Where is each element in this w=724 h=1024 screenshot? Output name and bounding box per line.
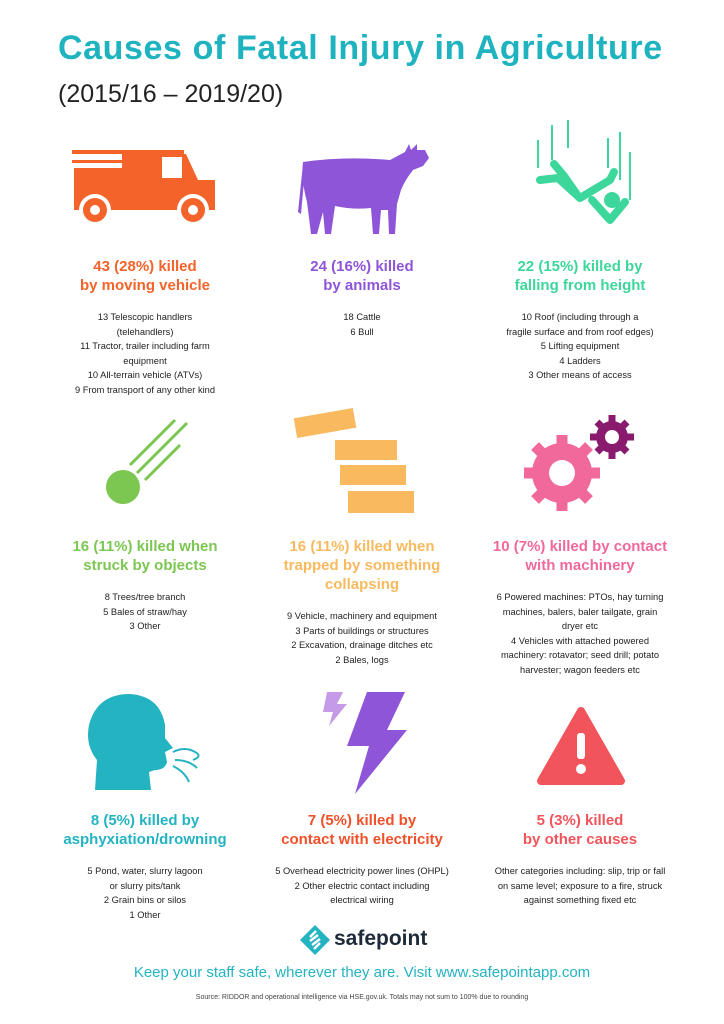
- details: trapped: 3 Parts of buildings or structures: [295, 626, 429, 636]
- details: height: fragile surface and from roof edges): [506, 326, 654, 336]
- details: asphyxiation: [87, 866, 203, 920]
- details: other: [495, 866, 665, 905]
- title: Causes of Fatal Injury in Agriculture: [58, 29, 663, 67]
- icon: meteor: [106, 419, 188, 504]
- heading: asphyxiation: 8 (5%) killed by: [91, 812, 199, 829]
- heading: trapped: trapped by something: [284, 557, 440, 574]
- tagline: Keep your staff safe, wherever they are. Visit www.safepointapp.com: [134, 964, 590, 981]
- icon: gears: [524, 415, 634, 511]
- details: asphyxiation: or slurry pits/tank: [110, 880, 180, 890]
- heading: height: [514, 258, 646, 294]
- details: trapped: 9 Vehicle, machinery and equipment: [287, 611, 437, 621]
- heading: trapped: [284, 538, 440, 593]
- icon: lightning: [323, 692, 407, 794]
- details: machinery: 6 Powered machines: PTOs, hay turning: [497, 592, 663, 602]
- details: trapped: 2 Bales, logs: [335, 654, 389, 664]
- details: asphyxiation: 2 Grain bins or silos: [104, 895, 186, 905]
- details: trapped: 2 Excavation, drainage ditches etc: [291, 640, 433, 650]
- details: height: 5 Lifting equipment: [541, 341, 619, 351]
- details: machinery: machines, balers, baler tailgate, grain: [503, 606, 657, 616]
- details: other: on same level; exposure to a fire, struck: [498, 880, 662, 890]
- heading: other: [523, 812, 637, 848]
- details: asphyxiation: 1 Other: [129, 910, 160, 920]
- heading: electricity: 7 (5%) killed by: [308, 812, 416, 829]
- heading: electricity: [281, 812, 443, 848]
- heading: machinery: [493, 538, 667, 574]
- details: electricity: [275, 866, 449, 905]
- details: struck: 8 Trees/tree branch: [105, 592, 185, 602]
- heading: struck: struck by objects: [83, 557, 207, 574]
- details: asphyxiation: 5 Pond, water, slurry lagoon: [87, 866, 203, 876]
- details: electricity: 2 Other electric contact including: [295, 880, 429, 890]
- details: height: 3 Other means of access: [528, 370, 632, 380]
- details: struck: 5 Bales of straw/hay: [103, 606, 187, 616]
- subtitle: (2015/16 – 2019/20): [58, 80, 283, 108]
- heading: animals: by animals: [323, 277, 401, 294]
- heading: animals: 24 (16%) killed: [310, 258, 414, 275]
- heading: vehicle: by moving vehicle: [80, 277, 210, 294]
- icon: warning triangle: [537, 707, 625, 785]
- details: height: 10 Roof (including through a: [522, 312, 638, 322]
- details: animals: 6 Bull: [350, 326, 374, 336]
- details: machinery: [497, 592, 663, 675]
- heading: asphyxiation: [63, 812, 227, 848]
- heading: trapped: collapsing: [325, 576, 399, 593]
- source note: Source: RIDDOR and operational intelligence via HSE.gov.uk. Totals may not sum to 100% due to rounding: [196, 994, 528, 1001]
- heading: electricity: contact with electricity: [281, 831, 443, 848]
- details: other: against something fixed etc: [524, 895, 636, 905]
- details: machinery: harvester; wagon feeders etc: [520, 664, 640, 674]
- heading: struck: [72, 538, 218, 574]
- details: struck: 3 Other: [129, 621, 160, 631]
- details: machinery: dryer etc: [562, 621, 598, 631]
- details: vehicle: 11 Tractor, trailer including farm: [80, 341, 210, 351]
- heading: machinery: 10 (7%) killed by contact: [493, 538, 667, 555]
- details: machinery: 4 Vehicles with attached powered: [511, 636, 649, 646]
- logo: safepoint: safepoint: [334, 927, 427, 950]
- details: electricity: electrical wiring: [330, 895, 394, 905]
- details: height: 4 Ladders: [559, 356, 601, 366]
- heading: height: 22 (15%) killed by: [517, 258, 643, 275]
- heading: other: 5 (3%) killed: [537, 812, 623, 829]
- details: animals: [343, 312, 381, 336]
- details: height: [506, 312, 654, 380]
- details: vehicle: 9 From transport of any other kind: [75, 384, 215, 394]
- heading: vehicle: 43 (28%) killed: [93, 258, 197, 275]
- logo: safepoint: [300, 925, 428, 955]
- details: electricity: 5 Overhead electricity power lines (OHPL): [275, 866, 449, 876]
- heading: other: by other causes: [523, 831, 637, 848]
- details: vehicle: 13 Telescopic handlers: [98, 312, 192, 322]
- heading: asphyxiation: asphyxiation/drowning: [63, 831, 227, 848]
- icon: cow: [298, 144, 429, 234]
- icon: stacked blocks: [294, 408, 414, 513]
- details: struck: [103, 592, 187, 631]
- details: vehicle: [75, 312, 215, 395]
- details: vehicle: 10 All-terrain vehicle (ATVs): [88, 370, 202, 380]
- details: vehicle: equipment: [123, 356, 167, 366]
- heading: vehicle: [80, 258, 210, 294]
- heading: trapped: 16 (11%) killed when: [289, 538, 435, 555]
- heading: struck: 16 (11%) killed when: [72, 538, 218, 555]
- heading: height: falling from height: [515, 277, 645, 294]
- details: machinery: machinery: rotavator; seed drill; potato: [501, 650, 659, 660]
- heading: animals: [310, 258, 414, 294]
- details: vehicle: (telehandlers): [117, 326, 173, 336]
- details: trapped: [287, 611, 437, 665]
- icon: head breathing: [88, 694, 200, 790]
- icon: van: [72, 150, 215, 222]
- details: other: Other categories including: slip, trip or fall: [495, 866, 665, 876]
- details: animals: 18 Cattle: [343, 312, 381, 322]
- icon: falling person: [536, 120, 631, 224]
- heading: machinery: with machinery: [525, 557, 635, 574]
